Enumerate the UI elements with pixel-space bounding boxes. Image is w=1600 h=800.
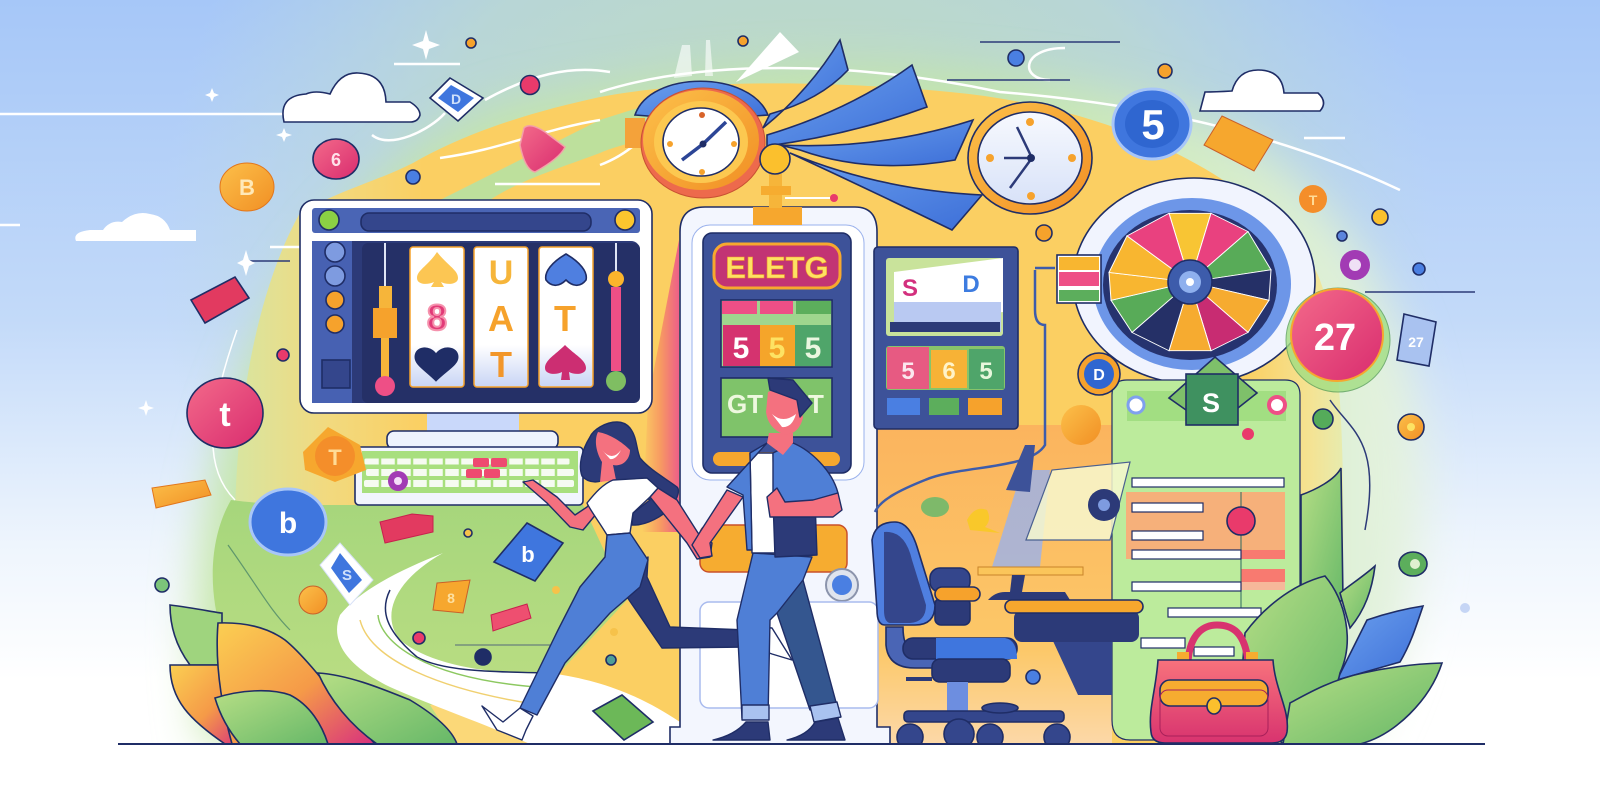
monitor: T — [490, 344, 512, 385]
blue coin 5: 5 — [1141, 101, 1165, 148]
coin 27 — [1286, 288, 1390, 392]
cabinet stem and pivot — [760, 144, 838, 208]
woman — [482, 422, 792, 740]
pink block centre — [380, 514, 433, 543]
cloud top left — [283, 73, 420, 122]
wheel of fortune — [1057, 178, 1315, 384]
yellow dome — [235, 83, 1343, 744]
coin T small: T — [1309, 192, 1318, 208]
pink coin t — [187, 378, 263, 448]
orange coin right — [1398, 414, 1424, 440]
bottom right leaf over clipboard — [1283, 663, 1442, 744]
cloud left — [75, 213, 196, 241]
wire cables — [875, 268, 1055, 512]
man — [692, 378, 845, 740]
green and yellow blobs — [921, 497, 1000, 533]
side machine: 6 — [942, 358, 956, 385]
sparkle stars — [138, 30, 440, 416]
gold bar — [152, 480, 211, 508]
monitor: U — [489, 254, 513, 292]
monitor: A — [488, 298, 514, 339]
big green leaf and lawn — [213, 500, 627, 744]
blue coin 5 — [1113, 89, 1191, 159]
pink coin t: t — [219, 396, 231, 434]
money note: S — [1202, 388, 1220, 418]
desk — [1005, 600, 1143, 695]
coin T small — [1299, 185, 1327, 213]
slot cabinet: GT — [727, 389, 763, 419]
side machine: 5 — [979, 358, 993, 385]
right leaf over clipboard — [1240, 576, 1347, 744]
green ring coin — [1399, 552, 1427, 576]
side machine: 5 — [901, 358, 915, 385]
money note — [1169, 357, 1257, 425]
pink gradient stripe — [642, 240, 679, 532]
sky motion lines — [0, 48, 1400, 500]
slot cabinet: 5 — [769, 332, 785, 365]
coin B orange: B — [239, 175, 255, 200]
floating dots — [155, 36, 1470, 684]
keyboard — [355, 447, 583, 505]
monitor: T — [554, 298, 576, 339]
left leaves — [170, 605, 457, 744]
orange card: 8 — [447, 590, 455, 606]
handbag — [1150, 625, 1287, 743]
blue diamond card — [430, 78, 483, 121]
blue ribbons — [763, 40, 982, 230]
side machine: S — [902, 275, 918, 302]
orange panel behind furniture — [860, 425, 1112, 744]
blue diamond card: D — [451, 91, 461, 107]
side machine: D — [962, 271, 980, 298]
slot cabinet — [670, 207, 890, 744]
blue coin b: b — [279, 507, 297, 540]
white swoosh road — [337, 553, 692, 744]
pink block left — [191, 277, 249, 323]
white card s — [320, 543, 373, 605]
orange coin small — [1061, 405, 1101, 445]
cloud top right — [1200, 70, 1324, 111]
blue coin b — [250, 489, 326, 555]
yellow under road — [430, 690, 620, 744]
clipboard — [1112, 380, 1300, 740]
sky thin lines — [250, 42, 1475, 530]
orange coin lawn — [299, 586, 327, 614]
right leaves — [1301, 468, 1423, 680]
monitor: 8 — [427, 297, 447, 338]
side machine — [874, 247, 1018, 429]
ground line and white floor — [0, 744, 1600, 800]
clock left with blue arc — [625, 81, 768, 198]
blue round button: D — [1093, 367, 1105, 384]
coin pink top — [313, 139, 359, 179]
orange card — [433, 580, 470, 613]
blue round button — [1078, 353, 1120, 395]
leaf vein line — [228, 545, 290, 630]
orange hex coin T: T — [328, 445, 342, 470]
blue card b: b — [521, 542, 535, 567]
purple coin — [1340, 250, 1370, 280]
slot cabinet: ELETG — [725, 250, 829, 285]
blue card b — [494, 523, 563, 581]
slot cabinet: T — [808, 389, 824, 419]
white card s: S — [342, 567, 352, 584]
green band in yellow dome — [440, 95, 680, 200]
orange rectangle — [1204, 116, 1273, 171]
slot cabinet: 5 — [733, 332, 749, 365]
coin 27: 27 — [1314, 317, 1356, 359]
desk monitor glass — [978, 445, 1130, 600]
white spike and rays — [674, 32, 799, 82]
background dome — [197, 71, 1425, 744]
monitor — [300, 200, 652, 449]
coin pink top: 6 — [331, 150, 341, 170]
pink pick — [520, 126, 565, 172]
green card bottom — [593, 695, 653, 740]
small blue card: 27 — [1408, 334, 1424, 350]
clock right — [968, 102, 1092, 214]
office chair — [872, 522, 1070, 750]
small blue card — [1397, 314, 1436, 366]
orange hex coin T — [303, 427, 366, 482]
slot cabinet: 5 — [805, 332, 821, 365]
red block lower — [491, 604, 531, 631]
coin B orange — [220, 163, 274, 211]
